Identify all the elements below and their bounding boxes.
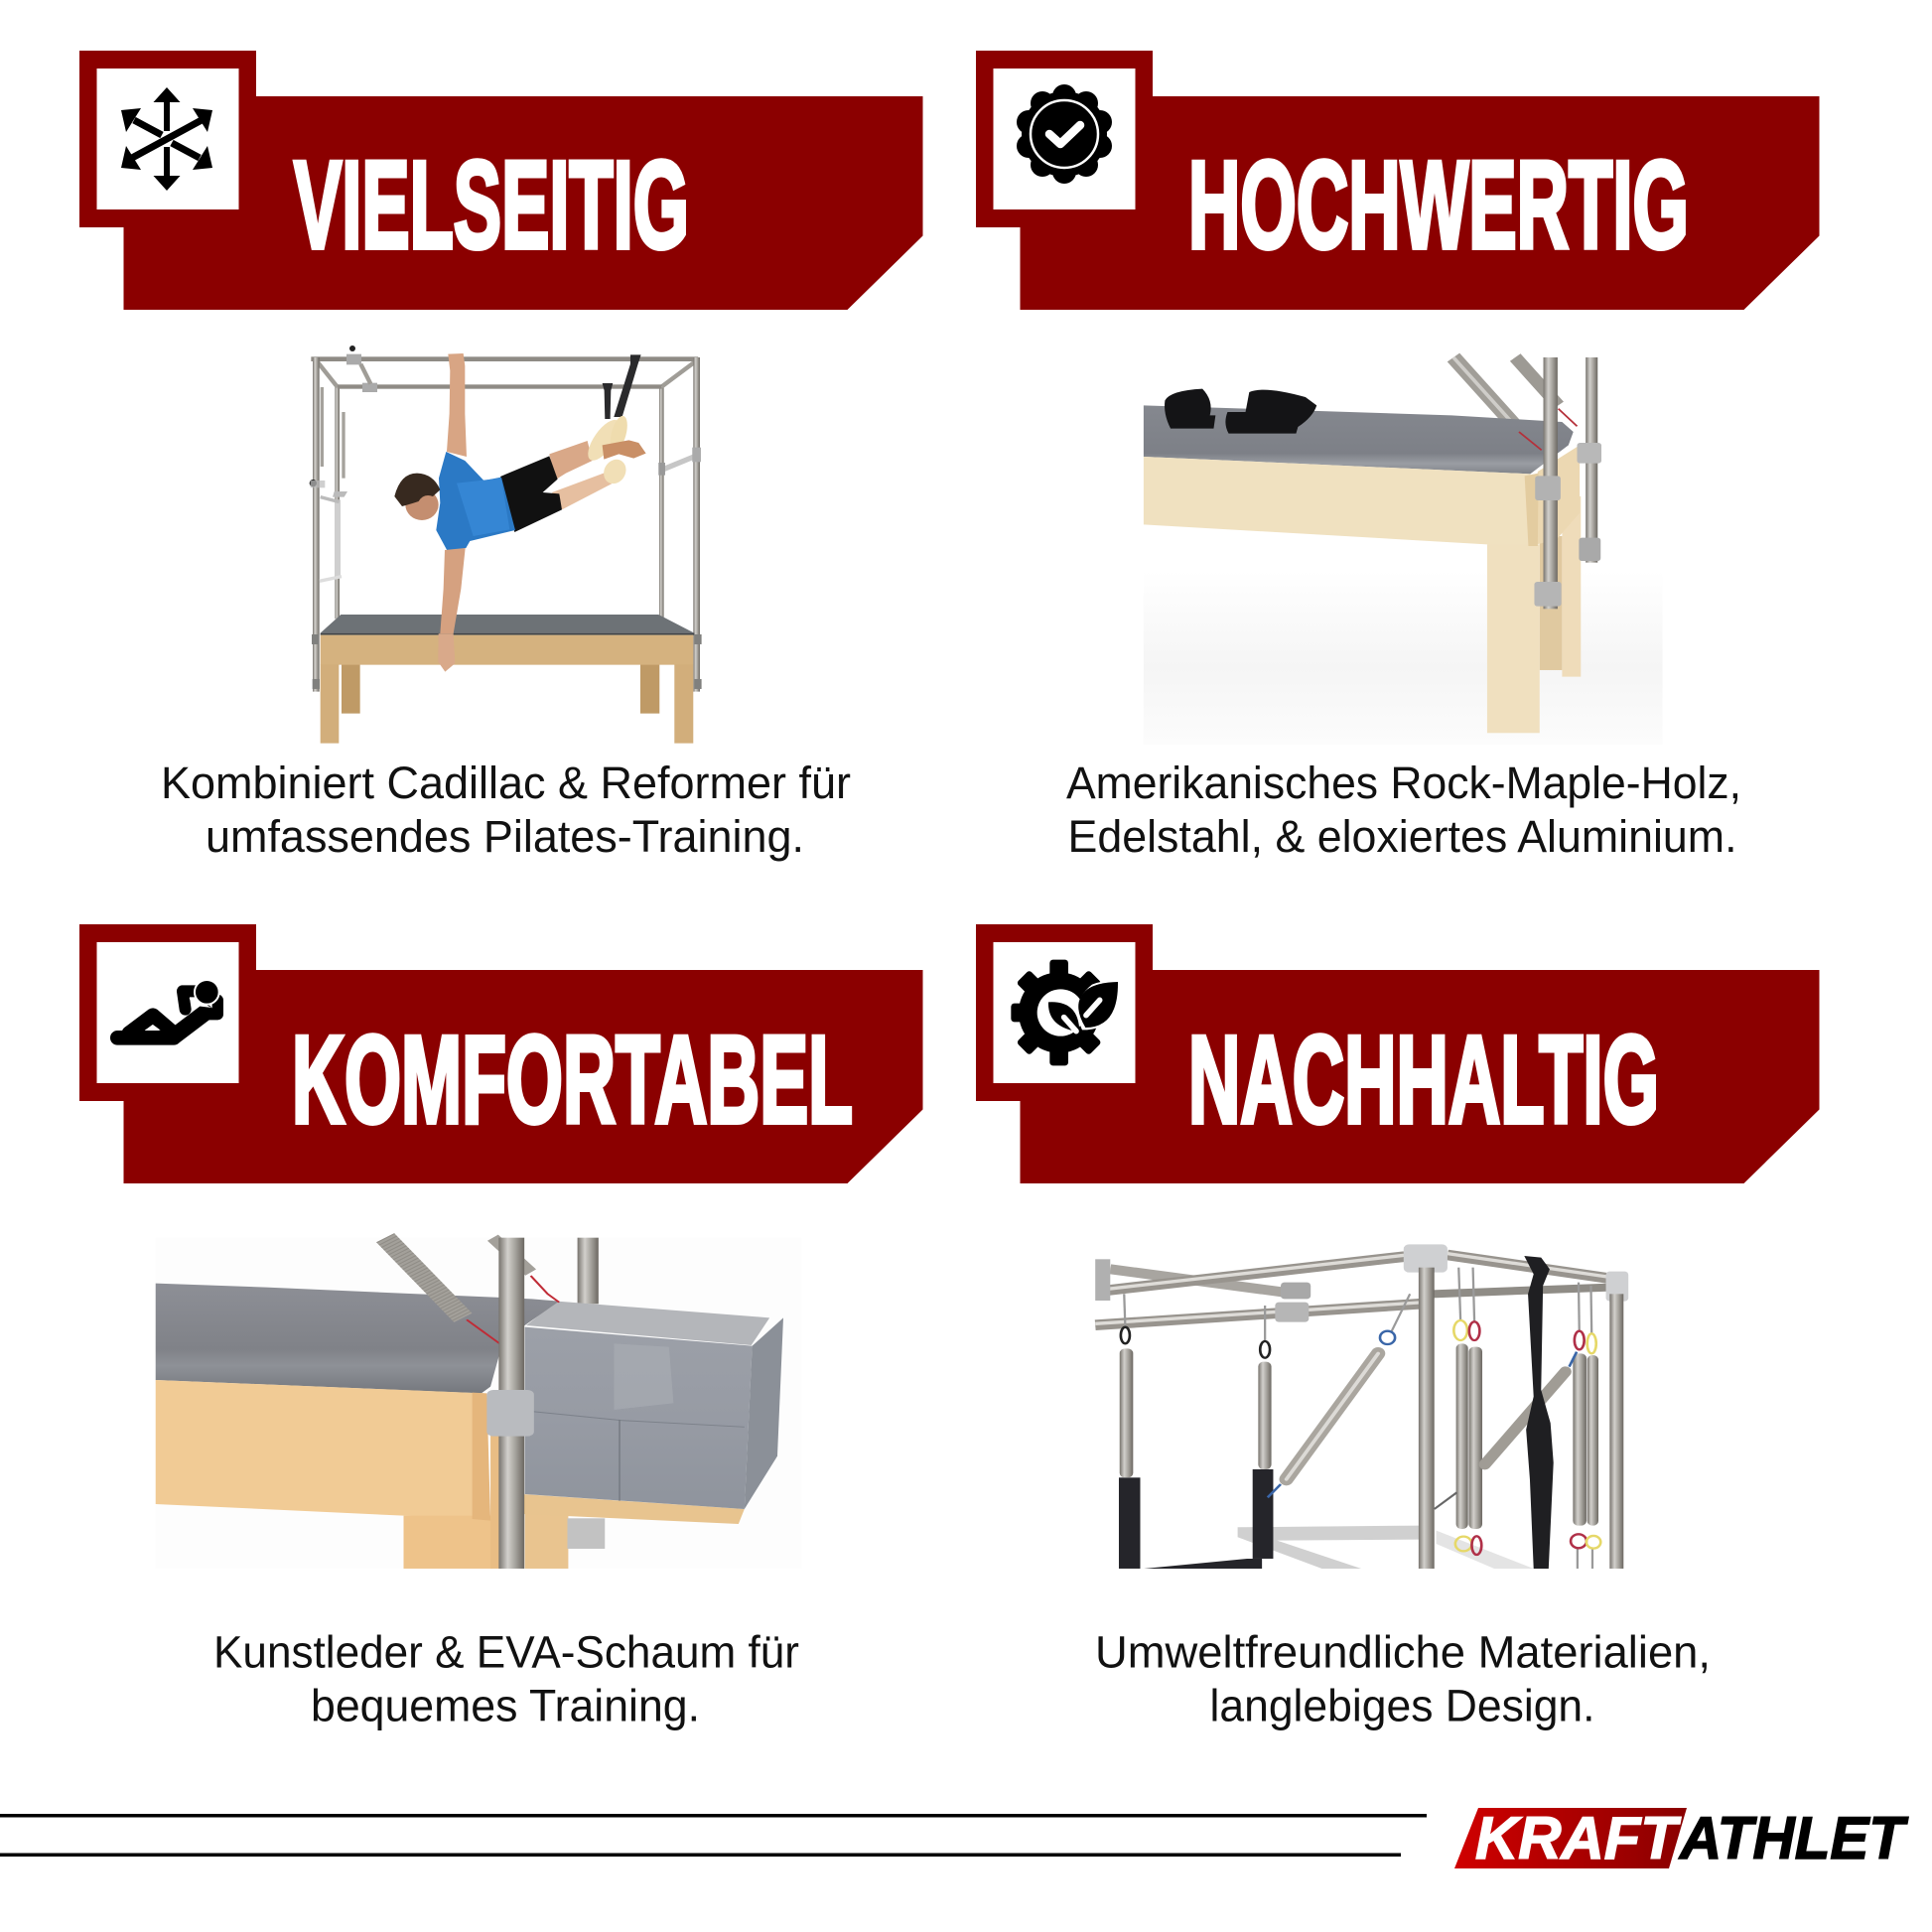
hooks bbox=[1124, 1268, 1592, 1569]
black strap bbox=[1524, 1256, 1554, 1569]
shorts bbox=[500, 456, 562, 532]
banner: nachhaltig bbox=[976, 924, 1819, 1183]
bench bbox=[321, 615, 694, 633]
photo: padded box on bench bbox=[156, 1238, 801, 1569]
icon: reclining person bbox=[117, 980, 219, 1037]
description: nachhaltig: langlebiges Design. bbox=[1209, 1680, 1594, 1731]
springs bbox=[385, 1238, 463, 1317]
box bbox=[526, 1302, 769, 1345]
wood bbox=[1144, 457, 1530, 546]
description: komfortabel: Kunstleder & EVA-Schaum für bbox=[213, 1626, 799, 1678]
heading: komfortabel: KOMFORTABEL bbox=[292, 1011, 853, 1150]
legs bbox=[549, 441, 593, 480]
photo: bench corner bbox=[1144, 357, 1663, 745]
photo: frame with springs bbox=[1095, 1244, 1628, 1569]
wooden shelf and rear leg bbox=[525, 1512, 568, 1569]
posts bbox=[1419, 1268, 1435, 1569]
back rails bbox=[1110, 1269, 1285, 1293]
foam loops bbox=[582, 415, 625, 466]
straps bbox=[614, 354, 641, 417]
description: vielseitig: umfassendes Pilates-Training. bbox=[206, 811, 804, 862]
icon: quality badge bbox=[1017, 84, 1112, 184]
description: hochwertig: Amerikanisches Rock-Maple-Holz, bbox=[1066, 758, 1741, 808]
raised arm bbox=[447, 353, 467, 457]
panel: komfortabel bbox=[79, 924, 923, 1731]
head bbox=[405, 489, 439, 520]
banner: hochwertig bbox=[976, 51, 1819, 310]
photo: man on cadillac frame bbox=[310, 345, 702, 744]
panel: nachhaltig bbox=[976, 924, 1819, 1731]
white bars bbox=[1238, 1526, 1420, 1569]
accessories bbox=[335, 499, 341, 576]
description: hochwertig: Edelstahl, & eloxiertes Aluminium. bbox=[1068, 811, 1737, 862]
frame back posts bbox=[321, 387, 664, 619]
logo: kraftathlet: KRAFT bbox=[1475, 1805, 1681, 1871]
icon: six arrows bbox=[121, 87, 212, 191]
pad bbox=[1144, 405, 1574, 474]
diagonal springs bbox=[1515, 357, 1559, 405]
icon: gear with leaves bbox=[1011, 960, 1125, 1065]
ankle cuffs bbox=[1165, 389, 1316, 434]
panel: vielseitig bbox=[79, 51, 923, 862]
springs bbox=[1120, 1343, 1598, 1529]
logo: kraftathlet bbox=[1454, 1805, 1908, 1871]
back legs and poles bbox=[1540, 536, 1562, 670]
description: nachhaltig bbox=[1095, 1626, 1711, 1731]
description: komfortabel bbox=[213, 1626, 799, 1731]
heading: vielseitig: VIELSEITIG bbox=[294, 137, 689, 274]
panel: hochwertig bbox=[976, 51, 1819, 862]
logo: kraftathlet: ATHLET bbox=[1678, 1805, 1908, 1871]
banner: vielseitig bbox=[79, 51, 923, 310]
wood front bbox=[156, 1380, 483, 1519]
black handles bbox=[1119, 1477, 1140, 1569]
colored loops bbox=[1121, 1320, 1600, 1555]
description: nachhaltig: Umweltfreundliche Materialien, bbox=[1095, 1626, 1711, 1678]
description: hochwertig bbox=[1066, 758, 1741, 862]
shirt bbox=[436, 452, 515, 551]
pad bbox=[156, 1284, 559, 1393]
lower arm bbox=[440, 548, 466, 633]
pole and clamp bbox=[498, 1238, 524, 1569]
description: vielseitig: Kombiniert Cadillac & Reformer für bbox=[161, 758, 851, 808]
description: komfortabel: bequemes Training. bbox=[311, 1680, 700, 1731]
front pole bbox=[1544, 357, 1558, 609]
description: vielseitig bbox=[161, 758, 851, 862]
banner: komfortabel bbox=[79, 924, 923, 1183]
